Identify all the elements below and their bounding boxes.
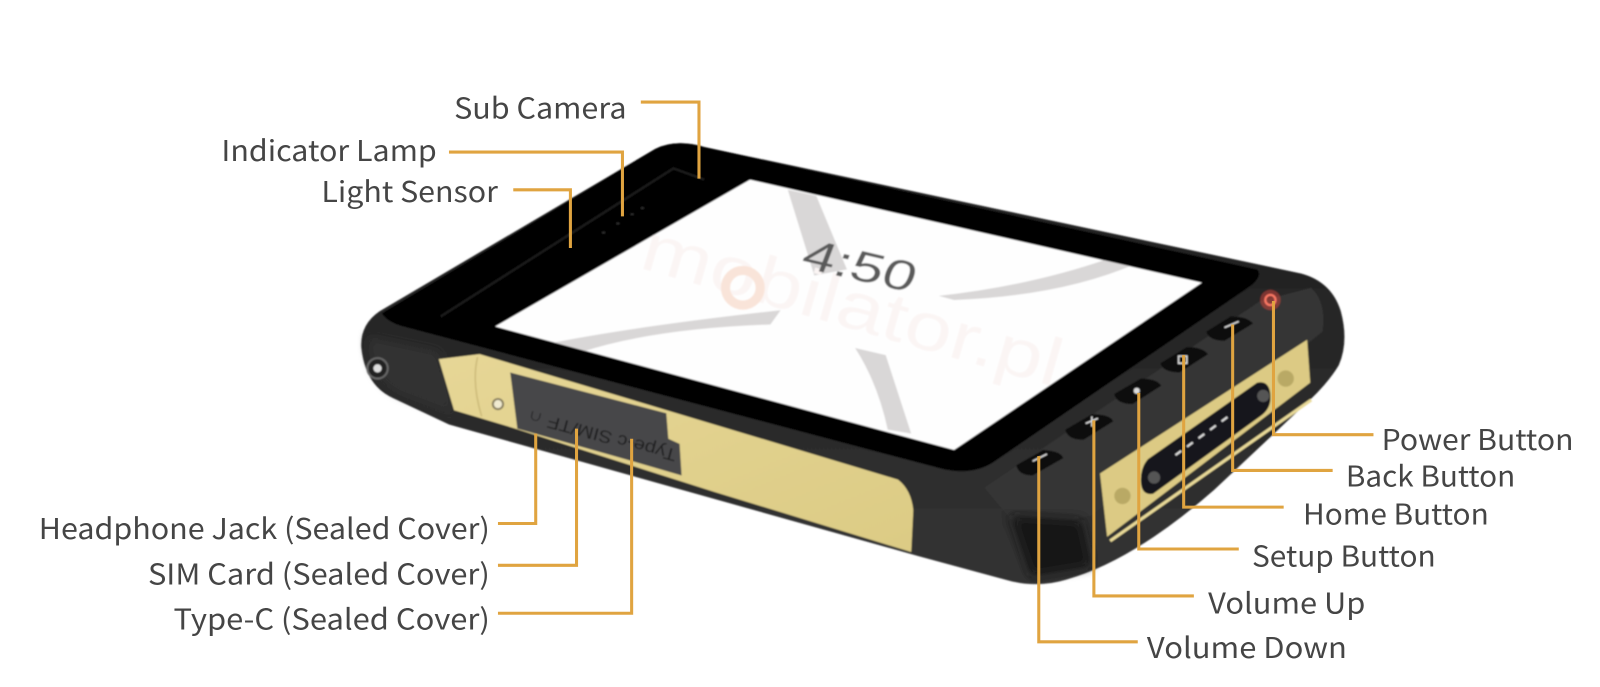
callout: Power Button — [1273, 301, 1573, 459]
callout: Volume Down: Volume Down — [1147, 626, 1347, 667]
sealed port cover — [510, 372, 682, 476]
faint watermark: mobilator.pl — [634, 210, 1071, 401]
screen — [495, 180, 1202, 450]
black front bezel — [382, 143, 1259, 471]
button side facet — [985, 288, 1323, 531]
infographic: rugged tablet component diagram — [42, 96, 1571, 658]
callout: SIM Card — [148, 429, 577, 594]
callout: Light Sensor: Light Sensor — [321, 170, 499, 211]
callout: Headphone Jack — [39, 434, 536, 548]
clock 4:50: 4:50 — [795, 231, 924, 302]
callout: Volume Up — [1094, 420, 1365, 622]
callout: Indicator Lamp — [221, 129, 622, 216]
callout: Sub Camera — [454, 86, 699, 179]
callout: Sub Camera: Sub Camera — [454, 86, 627, 127]
callout: Light Sensor — [321, 170, 570, 248]
button glyphs — [1033, 321, 1239, 461]
dock connector — [1141, 382, 1270, 494]
gold side panel with port cover — [367, 354, 913, 552]
side lens — [367, 358, 388, 379]
callout: Home Button: Home Button — [1303, 492, 1489, 533]
sensor dots — [602, 208, 644, 233]
panel seam — [475, 357, 482, 416]
gold side panel — [439, 354, 913, 552]
wallpaper X strokes — [547, 190, 1135, 434]
callout: Back Button — [1233, 324, 1515, 496]
gold right panel with dock connector — [1100, 340, 1311, 541]
callout: Setup Button: Setup Button — [1252, 534, 1436, 575]
side buttons — [1016, 316, 1253, 476]
callout: Type-C — [173, 439, 632, 639]
tablet device — [361, 143, 1344, 584]
lower left band highlight — [367, 337, 454, 413]
callout: Indicator Lamp: Indicator Lamp — [221, 129, 437, 170]
cover engraved text: Type-c SIM/TF ∩ — [526, 407, 679, 465]
callout: Power Button: Power Button — [1382, 418, 1573, 459]
callout: Volume Down — [1039, 456, 1347, 667]
bezel sensor groove — [441, 168, 704, 316]
callout: SIM Card: SIM Card (Sealed Cover) — [148, 553, 490, 594]
dark corner shading — [1010, 515, 1092, 577]
watermark logo ring — [726, 270, 760, 305]
tablet body shell — [361, 143, 1344, 584]
callout: Home Button — [1184, 355, 1489, 533]
callout: Setup Button — [1139, 393, 1436, 575]
callout: Volume Up: Volume Up — [1208, 581, 1365, 622]
callout: Type-C: Type-C (Sealed Cover) — [173, 598, 490, 639]
camera screw — [493, 399, 503, 409]
callout: Headphone Jack: Headphone Jack (Sealed Cover) — [39, 507, 490, 548]
power button — [1260, 290, 1281, 310]
callout: Back Button: Back Button — [1346, 455, 1515, 496]
